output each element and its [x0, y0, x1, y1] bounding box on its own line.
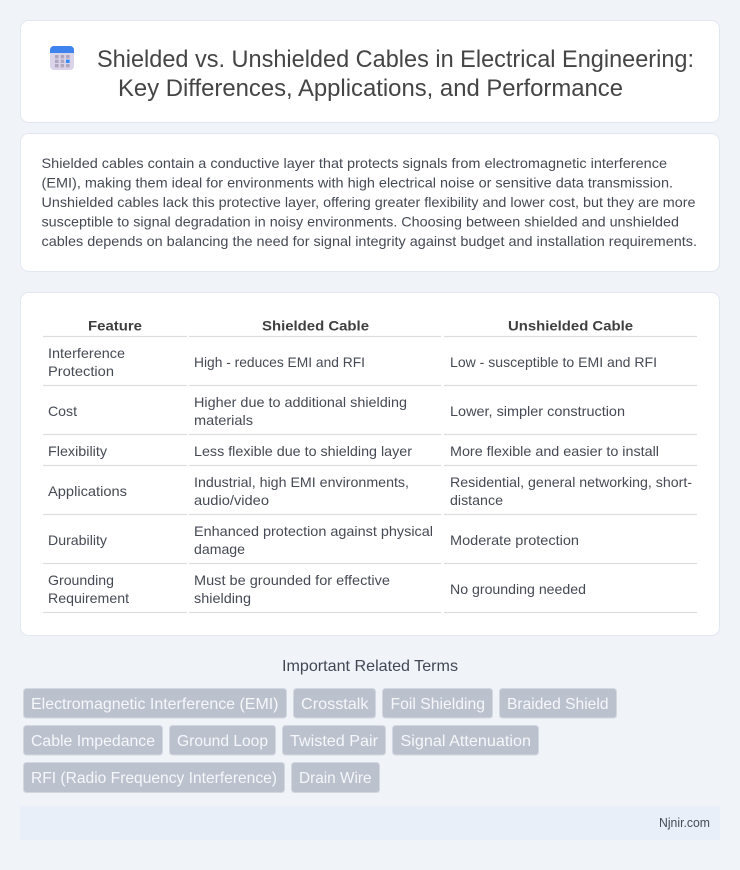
text block: introduction paragraph — [42, 155, 697, 249]
row: durability: Durability — [48, 532, 107, 548]
tag: crosstalk — [294, 688, 376, 718]
row: grounding requirement: Grounding — [48, 572, 114, 588]
tag: twisted pair — [282, 726, 386, 755]
tag: crosstalk: Crosstalk — [301, 696, 370, 713]
text block: introduction paragraph: (EMI), making them ideal for environments with high electrical noise or sensitive data transmission. — [42, 174, 673, 190]
row: interference protection — [43, 345, 697, 386]
tag: foil shielding — [382, 688, 492, 718]
row: interference protection: Low - susceptible to EMI and RFI — [450, 354, 657, 370]
text block: introduction paragraph: Shielded cables contain a conductive layer that protects signals from electromagnetic interference — [42, 155, 667, 171]
row: interference protection: Interference — [48, 345, 125, 361]
tag: radio frequency interference: RFI (Radio Frequency Interference) — [31, 770, 277, 787]
row: durability: Enhanced protection against physical — [194, 523, 433, 539]
row: grounding requirement: Must be grounded for effective — [194, 572, 390, 588]
text block: introduction paragraph: Unshielded cables lack this protective layer, offering greater flexibility and lower cost, but they are more — [42, 194, 696, 210]
row: flexibility — [43, 443, 697, 466]
table header: Feature — [88, 318, 142, 334]
row: interference protection: Protection — [48, 363, 114, 379]
title: Shielded vs. Unshielded Cables in Electrical Engineering: — [97, 46, 694, 73]
footer — [20, 806, 720, 840]
text block: introduction paragraph: susceptible to signal degradation in noisy environments. Choosing between shielded and unshielded — [42, 214, 679, 230]
row: flexibility: More flexible and easier to install — [450, 443, 659, 459]
row: applications: Industrial, high EMI environments, — [194, 474, 409, 490]
panel: title card — [20, 20, 720, 122]
tag: electromagnetic interference: Electromagnetic Interference (EMI) — [31, 696, 278, 713]
row: applications: audio/video — [194, 492, 269, 508]
row: applications: Residential, general networking, short- — [450, 474, 692, 490]
title — [97, 46, 694, 102]
row: cost: Higher due to additional shielding — [194, 394, 407, 410]
row: cost: materials — [194, 412, 253, 428]
row: durability: Moderate protection — [450, 532, 579, 548]
row: cost: Lower, simpler construction — [450, 403, 625, 419]
row: flexibility: Flexibility — [48, 443, 107, 459]
panel: comparison table — [20, 292, 720, 636]
tag: radio frequency interference — [24, 762, 284, 792]
tag: drain wire — [292, 762, 380, 792]
row: flexibility: Less flexible due to shielding layer — [194, 443, 412, 459]
tag: braided shield — [500, 688, 616, 718]
tag: ground loop: Ground Loop — [177, 733, 268, 750]
footer: Njnir.com — [659, 815, 710, 830]
row: grounding requirement — [43, 572, 697, 612]
tag: cable impedance: Cable Impedance — [31, 733, 155, 750]
row: cost: Cost — [48, 403, 77, 419]
tag: ground loop — [170, 726, 276, 755]
row: cost — [43, 394, 697, 434]
text block: introduction paragraph: cables depends on balancing the need for signal integrity against budget and installation requirements. — [42, 233, 697, 249]
row: durability — [43, 523, 697, 564]
tag: braided shield: Braided Shield — [507, 696, 608, 713]
row: applications — [43, 474, 697, 514]
row: grounding requirement: shielding — [194, 590, 251, 606]
table header: Shielded Cable — [262, 318, 369, 334]
panel: related term tags — [24, 688, 616, 792]
row: grounding requirement: No grounding needed — [450, 581, 586, 597]
row: durability: damage — [194, 541, 245, 557]
tag: twisted pair: Twisted Pair — [290, 733, 379, 750]
row: applications: distance — [450, 492, 503, 508]
heading: important related terms: Important Related Terms — [282, 658, 458, 675]
tag: foil shielding: Foil Shielding — [390, 696, 485, 713]
row: interference protection: High - reduces EMI and RFI — [194, 354, 365, 370]
table header — [43, 318, 697, 336]
tag: drain wire: Drain Wire — [299, 770, 372, 787]
tag: electromagnetic interference — [24, 688, 286, 718]
tag: signal attenuation — [392, 726, 538, 755]
icon: calendar — [50, 46, 74, 70]
tag: signal attenuation: Signal Attenuation — [400, 733, 531, 750]
title: Key Differences, Applications, and Performance — [118, 75, 623, 102]
panel: introduction — [20, 134, 720, 272]
table header: Unshielded Cable — [508, 318, 633, 334]
row: applications: Applications — [48, 483, 127, 499]
tag: cable impedance — [24, 726, 162, 755]
row: grounding requirement: Requirement — [48, 590, 129, 606]
